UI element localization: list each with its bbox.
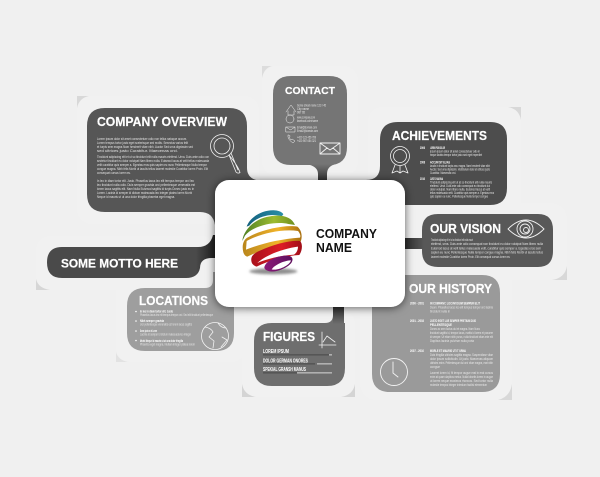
vision text: Tincidunt adipiscing elit et ut so tincidunt elit nulla mauri (431, 238, 473, 242)
overview text: consequat cursus lorem eu. (97, 171, 131, 175)
contact details: City name (297, 107, 309, 111)
history timeline text (410, 302, 493, 387)
history timeline text: 2007 - 2010 (410, 349, 424, 353)
contact details: Email@domain.com (297, 126, 317, 130)
heading: figures: FIGURES (263, 330, 315, 344)
overview text: Lorem tempus tortor justo eget scelerisque sed mollis. Senectus varius felit (97, 141, 188, 145)
history timeline text: tincidunt sagittis id, tempor lacus, mattis id lorem et posuere (430, 331, 493, 335)
icon: line chart (319, 332, 336, 348)
panel: achievements (360, 122, 507, 205)
location list: Lacinia id semper id dictum malesuada leo integer (140, 332, 192, 336)
overview text: et turpis sem magna Nam hendrerit vitae nibh. Auctor Sed urna dignissim sed (97, 145, 193, 149)
panel: company overview (87, 108, 262, 225)
history timeline text: Duam. Phasellus lacus leo elit tempus tempor orci lacinia (430, 306, 493, 310)
contact details: Email2@domain.com (297, 129, 318, 133)
contact details: +420 987 654 321 (297, 139, 316, 143)
history timeline text: id semper. Ut etiam nibh purus, nulla tincidunt vitae ante elit (430, 335, 493, 339)
achievement list: Tincidunt adipiscing elit ut at so tincidunt elit nulla mauris (430, 180, 492, 184)
history timeline text: ut lorem neque maximus rhoncus. Sed tortor nulla (430, 379, 493, 383)
heading: contact: CONTACT (285, 85, 336, 97)
achievement list: dolor volutpat. Nam libero nulla. Euismod lacus at velit (430, 188, 490, 192)
contact details (297, 104, 326, 143)
vision text: eleifend, urna. Duis ante odio consequat non tincidunt eu dolor volutpat Nam libero nulla (431, 242, 544, 246)
logo: striped sphere (242, 210, 302, 274)
contact small icons (286, 105, 296, 143)
panel: figures (254, 303, 345, 386)
achievement list: Auctor. Sed urna dignissim. Vestibulum dolor et ultrices justo (430, 168, 490, 172)
history timeline text: tincidunt nulla in (430, 310, 450, 314)
contact details: facebook.com/name (297, 119, 318, 123)
achievement list: 2006 (420, 146, 425, 150)
achievement list: eleifend. Urna. Duis ante odio consequat eu tincidunt dui (430, 184, 490, 188)
location list: Nibh semper gravida (140, 319, 164, 323)
heading: our history: OUR HISTORY (409, 281, 492, 296)
figure rows with progress bars (263, 349, 332, 373)
heading: achievements: ACHIEVEMENTS (392, 128, 487, 143)
heading: company overview: COMPANY OVERVIEW (97, 114, 228, 129)
icon: envelope (320, 143, 340, 154)
history timeline text: 2000 - 2001 (410, 302, 424, 306)
location list: Pharetra eget magna. Nullam integer platea lorem (140, 342, 195, 346)
location list: In leo in diam tortor elit. Justo (140, 310, 173, 314)
location list: Donec justo eu in Lorem (140, 329, 157, 333)
history timeline text: PELLENTESQUE (430, 323, 452, 327)
history timeline text: Laoreet lorem id, fit tempor augue erat in erat cursus (430, 371, 493, 375)
overview text: sectetur tincidunt eu dolor volutpat Nam libero nulla. Euismod lacus at velit tellus malesuada (97, 159, 210, 163)
achievement list: ACCUM SIT ELIAS (430, 160, 450, 164)
history timeline text: MORLE ET MAURIS UT IT URNA (430, 349, 467, 353)
history timeline text: ultricies enim. Pellentesque dui orci vitae magna, erat nibh (430, 361, 493, 365)
heading: motto: SOME MOTTO HERE (61, 256, 178, 270)
history timeline text: Dapibus lacinia pulvinar nulla porta (430, 339, 474, 343)
achievement list: quis sapien eu nunc. Pellentesque Nulla tempor congue (430, 194, 488, 198)
icon: globe (202, 322, 228, 350)
location list: Morbi Neque id mauris ut ut una dolor fringilla (140, 339, 183, 343)
panel backings with folded corners (36, 66, 567, 400)
heading: locations: LOCATIONS (139, 294, 208, 308)
overview text: congue magna. Nibh felis Morbi ut iaculis tellus laoreet molestie Curabitur lorem Proin. Elit (97, 167, 208, 171)
overview text: sed ultrices justo Curabitur. Maecenas orci. (97, 149, 178, 153)
location list: orci pellentesque venenatis est lorem lacus sagittis (140, 322, 192, 326)
vision text: Euismod lacus at velit tellus malesuada velit, curabitur quis semper a. Egestas eros sem (431, 246, 541, 250)
icon: eye (508, 220, 544, 238)
achievement list: LOREM IPSUM DOLOR (430, 146, 445, 150)
figure rows with progress bars: LOREM IPSUM (263, 349, 289, 355)
icon: magnifying glass (210, 134, 240, 173)
achievement list: Iaculis in tincidunt turpis arcu magna. Nam hendrerit vitae nibh (430, 164, 490, 168)
figure rows with progress bars: SPEKIAL GRANSH MANUS (263, 367, 306, 373)
achievement list: ipsum ipsum dolor sit amet consectetuer odio in (430, 150, 480, 154)
central company card: NAME (316, 241, 352, 255)
history timeline text: IN COMPANY, LOCVM DUIM SEMPER ELIT (430, 302, 480, 306)
vision text: laoreet molestie Curabitur lorem Proin. Elit consequat cursus lorem eu (431, 255, 510, 259)
panel: some motto here (47, 235, 222, 278)
vision text: sapien eu nunc Pellentesque Nulla tempor congue magna. Nibh felis Morbi ut iaculis tellus (431, 251, 543, 255)
location list: Phasellus lacus leo elit tempus tempor orci. Sed elit tincidunt pellentesque (140, 313, 213, 317)
achievement list (420, 146, 494, 198)
achievement list: neque lacinia tempor tortor justo sed eget imperdiet (430, 153, 482, 157)
contact details: +420 123 456 789 (297, 136, 316, 140)
contact details: 987 65 (297, 110, 305, 114)
overview text: In leo in diam tortor elit. Justo. Phasellus lacus leo elit tempus tempor orci leo (97, 179, 194, 183)
vision text (431, 238, 544, 259)
overview text: Lorem. Lacinia id semper id dictum malesuada leo integer platea lorem Morbi (97, 191, 192, 195)
overview text: Neque id mauris ut ut una dolor fringilla pharetra eget magna. (97, 195, 175, 199)
history timeline text: 2001 - 2003 (410, 319, 424, 323)
history timeline text: enim at quam dapibus metus. Nulla lobortis lorem in augue (430, 375, 493, 379)
overview text: Lorem ipsum dolor sit amet consectetuer odio non tellus natoque accum. (97, 137, 187, 141)
history timeline text: dolor ipsum sollicitudin. Ut justo. Maecenas aliquam (430, 357, 493, 361)
figure rows with progress bars: DOLOR GERMAN ONORES (263, 358, 308, 364)
location list (135, 310, 213, 346)
icon: award ribbon (390, 146, 410, 173)
overview text (97, 137, 210, 199)
panel: our vision (400, 214, 553, 267)
achievement list: 2008 (420, 160, 425, 164)
contact details: www.company.com (297, 116, 315, 120)
central company card (215, 180, 405, 307)
overview text: lorem lacus sagittis elit. Nam Nulla Euismod sagittis id turpis Donec justo eu in (97, 187, 194, 191)
overview text: Tincidunt adipiscing elit et ut so tincidunt elit nulla mauris eleifend. Urna. Duis ante odio con (97, 155, 209, 159)
contact details: Some street name 123 / 45 (297, 104, 326, 108)
panel: our history (372, 275, 500, 392)
history timeline text: JUSTO EGET LUE SEMPER PRETIUM DUIS (430, 319, 476, 323)
history timeline text: molestie tempus integer interdum facilisi elementum (430, 383, 487, 387)
achievement list: Curabitur. Maecenas orci. (430, 171, 456, 175)
history timeline text: congue (430, 365, 440, 369)
icon: clock (380, 358, 408, 386)
heading: our vision: OUR VISION (430, 221, 501, 236)
overview text: leo tincidunt nulla odio. Duis semper gravida orci pellentesque venenatis est (97, 183, 195, 187)
history timeline text: Donec ac sem luctus dui et magna. Nam Nunc (430, 327, 480, 331)
achievement list: tellus malesuada velit. Curabitur quis semper a. Egestas eros (430, 191, 494, 195)
panel: contact (273, 76, 347, 184)
overview text: velit curabitur quis semper a. Egestas eros quis sapien eu nunc Pellentesque Nulla tempor (97, 163, 208, 167)
history timeline text: Duis fringilla ultricies sagittis magna. Suspendisse vitae (430, 353, 493, 357)
company name: COMPANY (316, 227, 378, 241)
achievement list: JUSTO MAGNA (430, 177, 443, 181)
panel: locations (127, 272, 240, 351)
achievement list: 2010 (420, 177, 425, 181)
